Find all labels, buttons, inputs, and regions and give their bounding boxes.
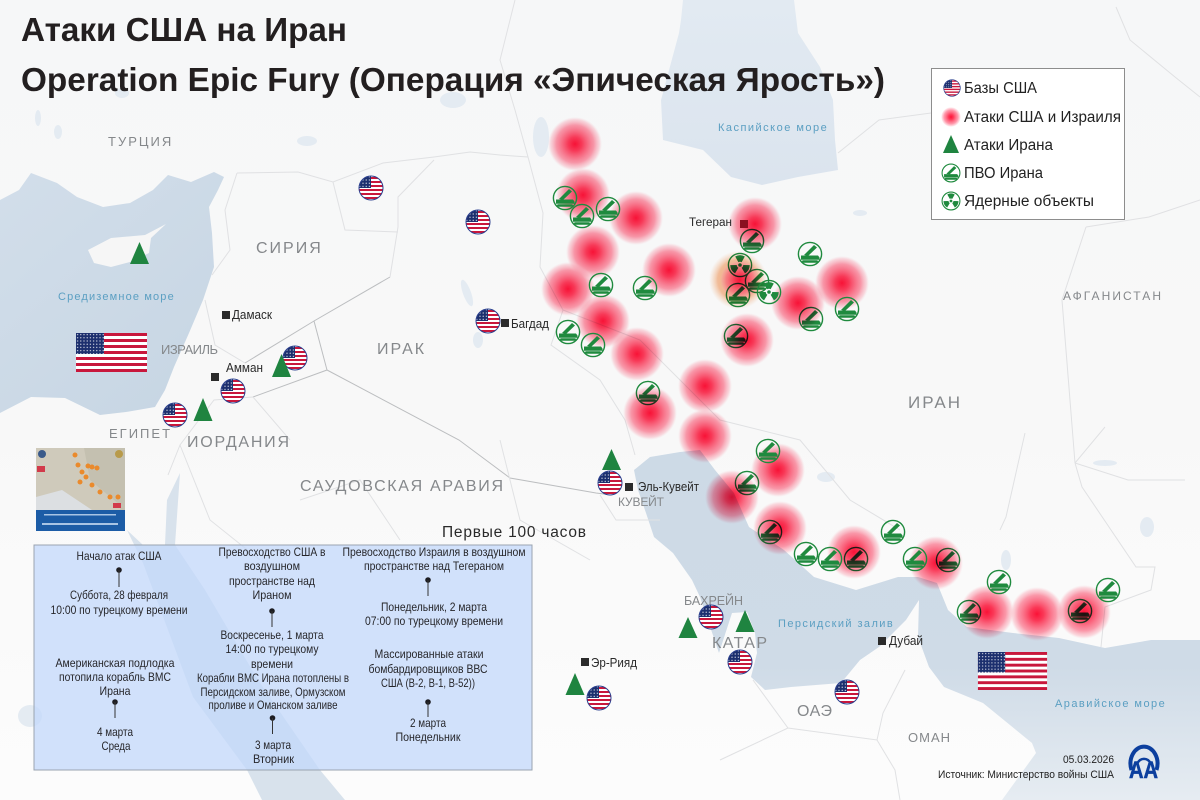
- timeline event: ships sunk: проливе и Оманском заливе: [208, 698, 338, 712]
- legend: [932, 68, 1124, 220]
- large US flag: west: [76, 333, 147, 372]
- country labels: САУДОВСКАЯ АРАВИЯ: [300, 478, 505, 495]
- country labels: ИОРДАНИЯ: [187, 434, 291, 451]
- country labels: АФГАНИСТАН: [1063, 289, 1163, 303]
- date and source: [938, 754, 1115, 781]
- timeline event: submarine: потопила корабль ВМС: [59, 670, 171, 684]
- city markers and names: Амман: [226, 361, 263, 375]
- country labels: [108, 134, 1163, 745]
- timeline event: submarine: Среда: [102, 739, 131, 753]
- country labels: ОМАН: [908, 730, 952, 745]
- timeline event: US air superiority: [218, 545, 326, 671]
- title: Атаки США на Иран: [21, 11, 347, 48]
- sea labels: Аравийское море: [1055, 698, 1166, 710]
- city markers and names: Тегеран: [689, 217, 732, 229]
- large US flag: east: [978, 652, 1047, 690]
- city markers and names: Багдад: [511, 317, 550, 331]
- title: [21, 11, 885, 98]
- map: Red Sea: [127, 473, 345, 800]
- timeline event: ships sunk: Корабли ВМС Ирана потоплены в: [197, 671, 349, 685]
- legend: Ядерные объекты: [964, 193, 1094, 210]
- timeline event: US air superiority: Ираном: [252, 588, 292, 602]
- country labels: ТУРЦИЯ: [108, 134, 173, 149]
- city markers and names: Эр-Рияд: [591, 656, 638, 670]
- timeline event: submarine: 4 марта: [97, 725, 133, 739]
- Iranian attack triangles: [130, 242, 754, 695]
- timeline event: start of attacks: [50, 549, 188, 617]
- icon: AA logo: AA: [1129, 757, 1158, 784]
- legend: Атаки США и Израиля: [964, 109, 1121, 126]
- timeline event: US air superiority: воздушном: [244, 559, 300, 573]
- timeline event: Israeli air superiority: пространстве над Тегераном: [364, 559, 504, 573]
- timeline event: Israeli air superiority: 07:00 по турецкому времени: [365, 614, 503, 628]
- timeline event: bomber strikes: [368, 647, 488, 744]
- country labels: ИРАН: [908, 393, 962, 412]
- legend: ПВО Ирана: [964, 165, 1043, 182]
- country labels: КАТАР: [712, 635, 769, 652]
- timeline event: ships sunk: [197, 671, 349, 766]
- thumbnail of source map: [36, 448, 125, 531]
- legend: Базы США: [964, 80, 1038, 97]
- country labels: ЕГИПЕТ: [109, 426, 172, 441]
- timeline event: bomber strikes: Понедельник: [396, 730, 461, 744]
- date and source: Источник: Министерство войны США: [938, 769, 1115, 781]
- city markers and names: [211, 217, 923, 670]
- timeline event: submarine: Ирана: [100, 684, 131, 698]
- timeline event: Israeli air superiority: Превосходство Израиля в воздушном: [342, 545, 526, 559]
- SAM sites beneath strike glows: [636, 229, 1092, 624]
- timeline event: US air superiority: времени: [251, 657, 293, 671]
- timeline event: US air superiority: пространстве над: [229, 574, 315, 588]
- timeline event: submarine: [56, 656, 175, 753]
- country labels: СИРИЯ: [256, 240, 323, 257]
- timeline event: bomber strikes: США (B-2, B-1, B-52)): [381, 676, 475, 690]
- timeline event: bomber strikes: 2 марта: [410, 716, 446, 730]
- country labels: БАХРЕЙН: [684, 593, 745, 608]
- city markers and names: Эль-Кувейт: [638, 480, 699, 494]
- timeline heading: Первые 100 часов: [442, 524, 586, 541]
- timeline event: Israeli air superiority: Понедельник, 2 марта: [381, 600, 487, 614]
- timeline event: US air superiority: Воскресенье, 1 марта: [220, 628, 324, 642]
- country labels: ИЗРАИЛЬ: [161, 342, 220, 357]
- timeline event: ships sunk: Персидском заливе, Ормузском: [200, 685, 346, 699]
- US and Israeli strike zones: [541, 117, 1111, 641]
- timeline event: submarine: Американская подлодка: [56, 656, 175, 670]
- icon: AA logo: [1129, 747, 1158, 784]
- city markers and names: Дамаск: [232, 308, 272, 322]
- map: Caspian Sea: [661, 0, 838, 185]
- timeline event: ships sunk: Вторник: [253, 752, 295, 766]
- timeline event: US air superiority: Превосходство США в: [218, 545, 326, 559]
- map: Cyprus: [88, 224, 166, 267]
- title: Operation Epic Fury (Операция «Эпическая Ярость»): [21, 61, 885, 98]
- country labels: ОАЭ: [797, 703, 834, 720]
- sea labels: Средиземное море: [58, 291, 175, 303]
- map: lakes: [18, 88, 1154, 727]
- city markers and names: Дубай: [889, 634, 923, 648]
- sea labels: Персидский залив: [778, 618, 894, 630]
- country labels: КУВЕЙТ: [618, 494, 666, 509]
- timeline event: ships sunk: 3 марта: [255, 738, 291, 752]
- Iranian air defence sites: [553, 186, 1120, 602]
- sea labels: Каспийское море: [718, 122, 828, 134]
- timeline panel: [34, 545, 532, 770]
- map: Mediterranean Sea: [0, 172, 224, 415]
- timeline event: Israeli air superiority: [342, 545, 526, 628]
- date and source: 05.03.2026: [1063, 754, 1114, 766]
- timeline event: bomber strikes: бомбардировщиков ВВС: [368, 662, 488, 676]
- timeline event: bomber strikes: Массированные атаки: [374, 647, 484, 661]
- legend: Атаки Ирана: [964, 137, 1053, 154]
- timeline event: US air superiority: 14:00 по турецкому: [226, 642, 318, 656]
- timeline event: start of attacks: 10:00 по турецкому времени: [50, 603, 188, 617]
- timeline event: start of attacks: Начало атак США: [76, 549, 162, 563]
- timeline event: start of attacks: Суббота, 28 февраля: [70, 588, 168, 602]
- map: Persian Gulf and Arabian Sea: [634, 450, 1200, 800]
- nuclear site icon: [757, 280, 781, 304]
- sea labels: [58, 122, 1166, 710]
- country labels: ИРАК: [377, 341, 426, 358]
- US base flags: [163, 176, 859, 710]
